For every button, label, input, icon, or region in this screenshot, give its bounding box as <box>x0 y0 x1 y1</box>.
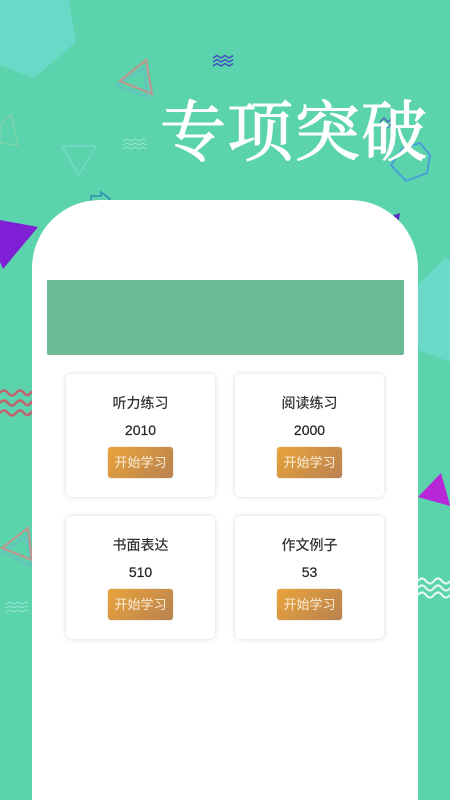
card: writing: 书面表达 <box>112 537 168 553</box>
card: reading: 2000 <box>294 422 325 438</box>
card: reading: 开始学习 <box>283 455 336 470</box>
icon: white waves right <box>418 578 450 598</box>
card: essay examples <box>235 516 384 639</box>
icon: faint down triangle <box>62 146 96 175</box>
icon: blue hexagon <box>391 143 430 181</box>
icon: red outline triangle <box>117 60 152 97</box>
icon: pale waves lower left <box>6 602 28 612</box>
card: listening: 听力练习 <box>112 395 168 411</box>
banner <box>47 280 404 355</box>
card: writing <box>66 516 215 639</box>
card: listening <box>66 374 215 497</box>
card: listening: 开始学习 <box>114 455 166 470</box>
panel: white phone screen <box>32 200 418 800</box>
icon: red outline triangle left <box>2 528 32 566</box>
card: reading: 阅读练习 <box>282 395 338 411</box>
icon: teal pentagon top left <box>0 0 76 78</box>
title: 专项突破 <box>160 79 428 174</box>
icon: purple triangle left <box>0 220 38 269</box>
icon: magenta triangle <box>418 473 450 506</box>
card: essay examples: 作文例子 <box>282 537 338 553</box>
icon: small purple triangle <box>385 213 400 232</box>
icon: pale waves <box>123 139 146 149</box>
icon: navy waves behind title <box>380 118 396 127</box>
icon: teal pentagon right <box>418 258 450 362</box>
card: listening: 2010 <box>125 422 156 438</box>
card: essay examples: 53 <box>302 564 317 580</box>
icon: navy waves <box>213 56 233 66</box>
icon: faint yellow triangle <box>0 115 18 145</box>
card: essay examples: 开始学习 <box>283 597 336 612</box>
icon: blue arrow outline <box>91 192 110 204</box>
card: reading <box>235 374 384 497</box>
card: writing: 510 <box>129 564 152 580</box>
icon: red waves left <box>0 390 32 416</box>
card: writing: 开始学习 <box>114 597 166 612</box>
